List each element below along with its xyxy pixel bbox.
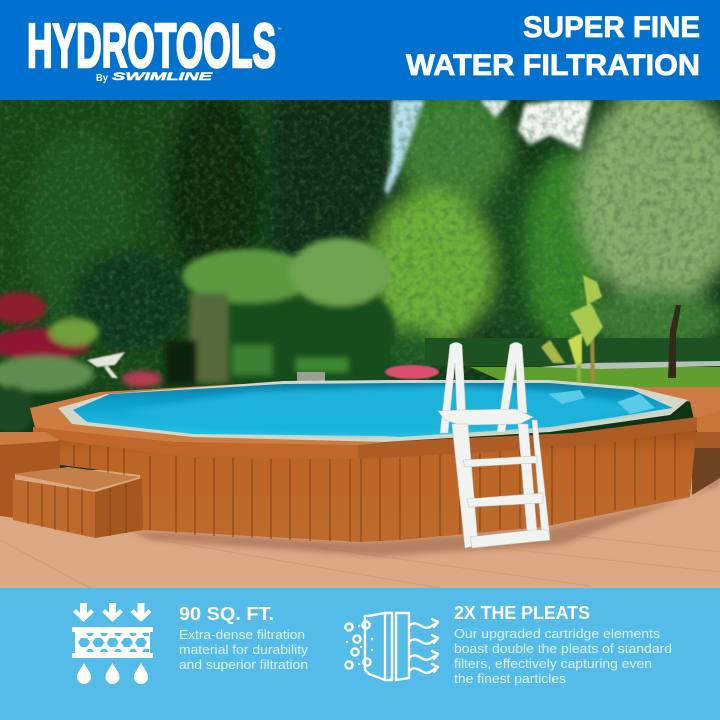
text block: 2X the pleats: boast double the pleats of standard	[454, 642, 672, 656]
logo: Hydrotools by Swimline	[27, 12, 282, 84]
title	[406, 11, 700, 82]
lawn and gravel	[385, 305, 720, 388]
pool wall	[33, 417, 697, 542]
right deck	[633, 387, 720, 495]
text block: 2X the pleats: Our upgraded cartridge elements	[454, 627, 660, 641]
text block: 2X the pleats: the finest particles	[454, 672, 566, 686]
logo: Hydrotools by Swimline: SWIMLINE	[112, 71, 213, 83]
icon: filter layers with arrows and drops	[72, 603, 153, 684]
lawn chair	[87, 352, 125, 378]
logo: Hydrotools by Swimline: By	[96, 72, 108, 84]
foliage texture	[0, 100, 720, 390]
red maple and shrubs	[0, 292, 162, 434]
sky	[384, 100, 592, 195]
text block: 90 sq. ft.: 90 SQ. FT.	[179, 604, 274, 624]
icon: pleated cartridge with particles and airflow	[345, 613, 438, 680]
logo: Hydrotools by Swimline: ™	[277, 27, 282, 33]
pool ladder	[438, 342, 550, 548]
header band	[0, 0, 720, 100]
hedge arbour	[165, 238, 395, 390]
pool coping and water	[58, 380, 688, 442]
text block: 2X the pleats	[454, 603, 672, 686]
text block: 2X the pleats: 2X THE PLEATS	[454, 603, 590, 623]
left pool deck top	[30, 384, 400, 446]
text block: 90 sq. ft.: and superior filtration	[179, 658, 308, 672]
text block: 90 sq. ft.: material for durability	[179, 643, 309, 657]
background trees	[0, 85, 720, 400]
deck floor	[0, 470, 720, 588]
logo: Hydrotools by Swimline: HYDROTOOLS	[27, 12, 276, 81]
text block: 90 sq. ft.	[179, 604, 309, 672]
features band	[0, 588, 720, 720]
left steps	[0, 432, 143, 538]
title: SUPER FINE	[523, 11, 700, 44]
text block: 90 sq. ft.: Extra-dense filtration	[179, 628, 305, 642]
banana plant	[541, 275, 603, 383]
text block: 2X the pleats: filters, effectively capturing even	[454, 657, 652, 671]
photo: backyard pool on wooden deck	[0, 85, 720, 588]
title: WATER FILTRATION	[406, 49, 700, 82]
